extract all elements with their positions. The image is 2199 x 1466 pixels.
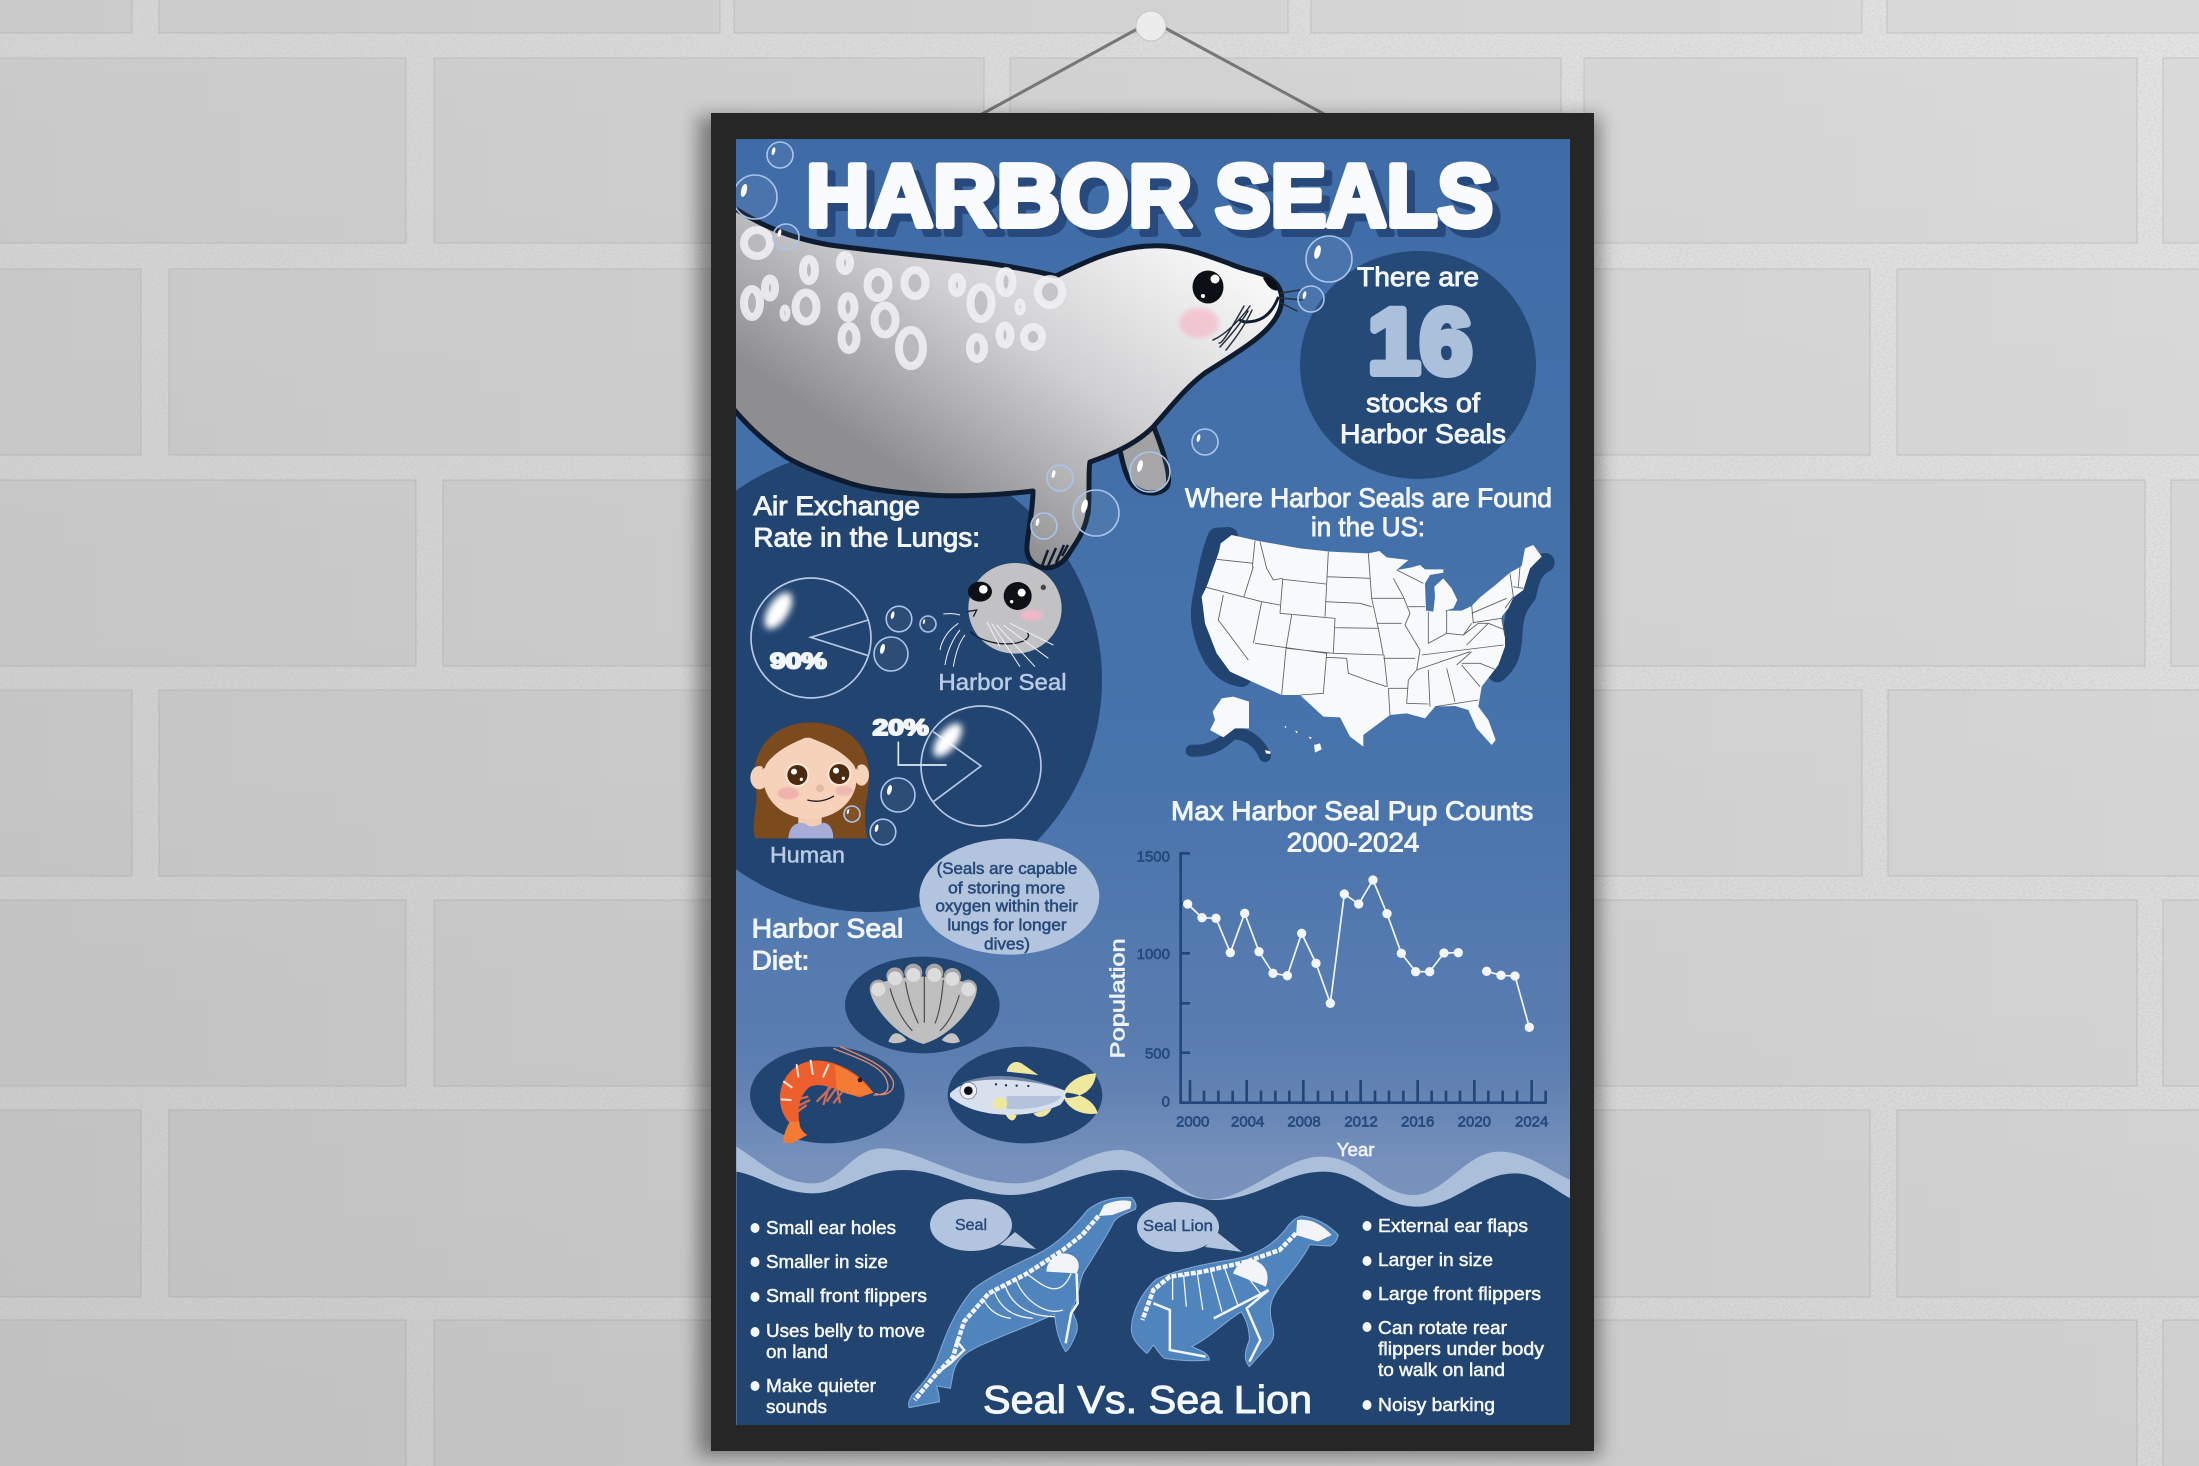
icon: human (750, 723, 869, 838)
title (808, 162, 1501, 238)
wave: light band (736, 1147, 1570, 1240)
bubbles: around large seal (733, 142, 1352, 539)
list: sea lion traits: Noisy barking (1378, 1395, 1495, 1415)
heading: where harbor seals are found: Where Harbor Seals are Found (1185, 483, 1552, 513)
icon: fish (948, 1047, 1102, 1143)
list: seal traits (750, 1218, 927, 1417)
chart: y axis labels (1137, 849, 1170, 1111)
text: there are: There are (1357, 262, 1479, 292)
chart: y axis labels: 0 (1162, 1094, 1170, 1111)
callout: oxygen note: dives) (984, 935, 1030, 953)
text: stocks of harbor seals: Harbor Seals (1340, 419, 1506, 449)
seal face (1179, 270, 1302, 350)
chart: x axis labels: 2008 (1287, 1114, 1321, 1131)
flipper claws (1042, 545, 1068, 566)
list: sea lion traits (1362, 1216, 1544, 1415)
seal spots (744, 230, 1062, 366)
heading: where harbor seals are found: in the US: (1311, 512, 1425, 542)
heading: diet: Diet: (752, 945, 809, 975)
chart: harbor seal 90 percent pie (751, 578, 871, 698)
seal body (720, 202, 1282, 568)
map: alaska (1210, 697, 1271, 754)
list: seal traits: Small ear holes (766, 1218, 896, 1238)
title: SEALS (1215, 146, 1493, 245)
heading: air exchange rate: Rate in the Lungs: (753, 523, 980, 553)
list: sea lion traits: External ear flaps (1378, 1216, 1528, 1236)
chart: axis titles: Year (1337, 1139, 1375, 1160)
chart: human 20 percent pie (873, 706, 1041, 826)
label: human: Human (770, 843, 845, 868)
list: seal traits: on land (766, 1342, 828, 1362)
callout: oxygen note: (Seals are capable (937, 860, 1077, 878)
chart: axis titles (1106, 938, 1375, 1160)
waves (736, 1147, 1570, 1427)
callout: seal label: Seal (955, 1217, 987, 1234)
callout: oxygen note: lungs for longer (947, 917, 1067, 935)
wave: dark sea (736, 1170, 1570, 1427)
map: lower 48 (1202, 535, 1542, 747)
black poster frame (711, 113, 1594, 1451)
title: HARBOR (806, 146, 1192, 245)
number: 16: 16 (1368, 291, 1472, 393)
list: sea lion traits: to walk on land (1378, 1360, 1505, 1380)
chart axes (1181, 853, 1547, 1103)
callout: oxygen note: of storing more (948, 879, 1065, 897)
heading: chart title: 2000-2024 (1287, 828, 1419, 858)
map: hawaii (1284, 726, 1322, 753)
frame shadow (698, 116, 1600, 1456)
hanging wire and peg (982, 11, 1324, 114)
map: state borders (1206, 541, 1523, 715)
chart: human 20 percent pie: 20% (873, 715, 929, 740)
chart: y axis labels: 500 (1145, 1045, 1170, 1062)
bubbles: lungs (844, 606, 936, 845)
chart: x axis labels: 2012 (1344, 1114, 1378, 1131)
list: sea lion traits: flippers under body (1378, 1339, 1544, 1359)
chart: population line (1183, 875, 1534, 1032)
heading: air exchange rate: Air Exchange (753, 491, 920, 521)
back flipper (1120, 425, 1169, 493)
heading: seal vs sea lion: Seal Vs. Sea Lion (983, 1379, 1312, 1422)
heading: diet: Harbor Seal (752, 913, 903, 943)
panel: stocks circle (1300, 251, 1536, 479)
chart: x axis labels: 2004 (1231, 1114, 1264, 1131)
illustration: seal skeleton (909, 1197, 1136, 1408)
icon: clam (845, 957, 1000, 1053)
callout: seal label (930, 1199, 1036, 1251)
callout: sea lion label: Seal Lion (1143, 1218, 1213, 1235)
text: stocks of harbor seals: stocks of (1366, 388, 1481, 418)
illustration: sea lion skeleton (1131, 1216, 1338, 1367)
chart: x axis labels: 2020 (1458, 1114, 1491, 1131)
illustration: large seal (720, 202, 1302, 568)
callout: oxygen note: oxygen within their (935, 898, 1079, 916)
chart: harbor seal 90 percent pie: 90% (770, 648, 827, 673)
poster (736, 139, 1570, 1425)
heading: chart title: Max Harbor Seal Pup Counts (1171, 796, 1533, 826)
panel: air exchange dark circle (736, 462, 1102, 912)
map: coastal range highlight (1192, 537, 1545, 756)
list: sea lion traits: Large front flippers (1378, 1284, 1541, 1304)
label: harbor seal: Harbor Seal (938, 669, 1067, 695)
panel: pup counts chart (1106, 796, 1548, 1160)
chart: y axis labels: 1000 (1137, 946, 1170, 963)
icon: shrimp (750, 1047, 905, 1143)
chart: x axis labels (1176, 1114, 1548, 1131)
panel: seal vs sea lion (750, 1197, 1544, 1422)
chart: y axis labels: 1500 (1137, 849, 1170, 866)
list: seal traits: sounds (766, 1397, 827, 1417)
map: united states (1192, 535, 1545, 756)
chart: x axis labels: 2016 (1401, 1114, 1434, 1131)
icon: harbor seal head (940, 563, 1062, 667)
callout: sea lion label (1137, 1202, 1242, 1252)
panel: air exchange (750, 491, 1067, 868)
list: seal traits: Make quieter (766, 1376, 876, 1396)
chart: x axis labels: 2000 (1176, 1114, 1209, 1131)
chart: axis titles: Population (1106, 938, 1129, 1058)
chart: x axis labels: 2024 (1515, 1114, 1548, 1131)
list: seal traits: Uses belly to move (766, 1321, 925, 1341)
list: seal traits: Small front flippers (766, 1286, 927, 1306)
list: sea lion traits: Can rotate rear (1378, 1318, 1507, 1338)
list: seal traits: Smaller in size (766, 1252, 888, 1272)
poster background (736, 139, 1570, 1425)
list: sea lion traits: Larger in size (1378, 1250, 1493, 1270)
callout: oxygen note (919, 839, 1099, 955)
panel: harbor seal diet (750, 913, 1102, 1143)
